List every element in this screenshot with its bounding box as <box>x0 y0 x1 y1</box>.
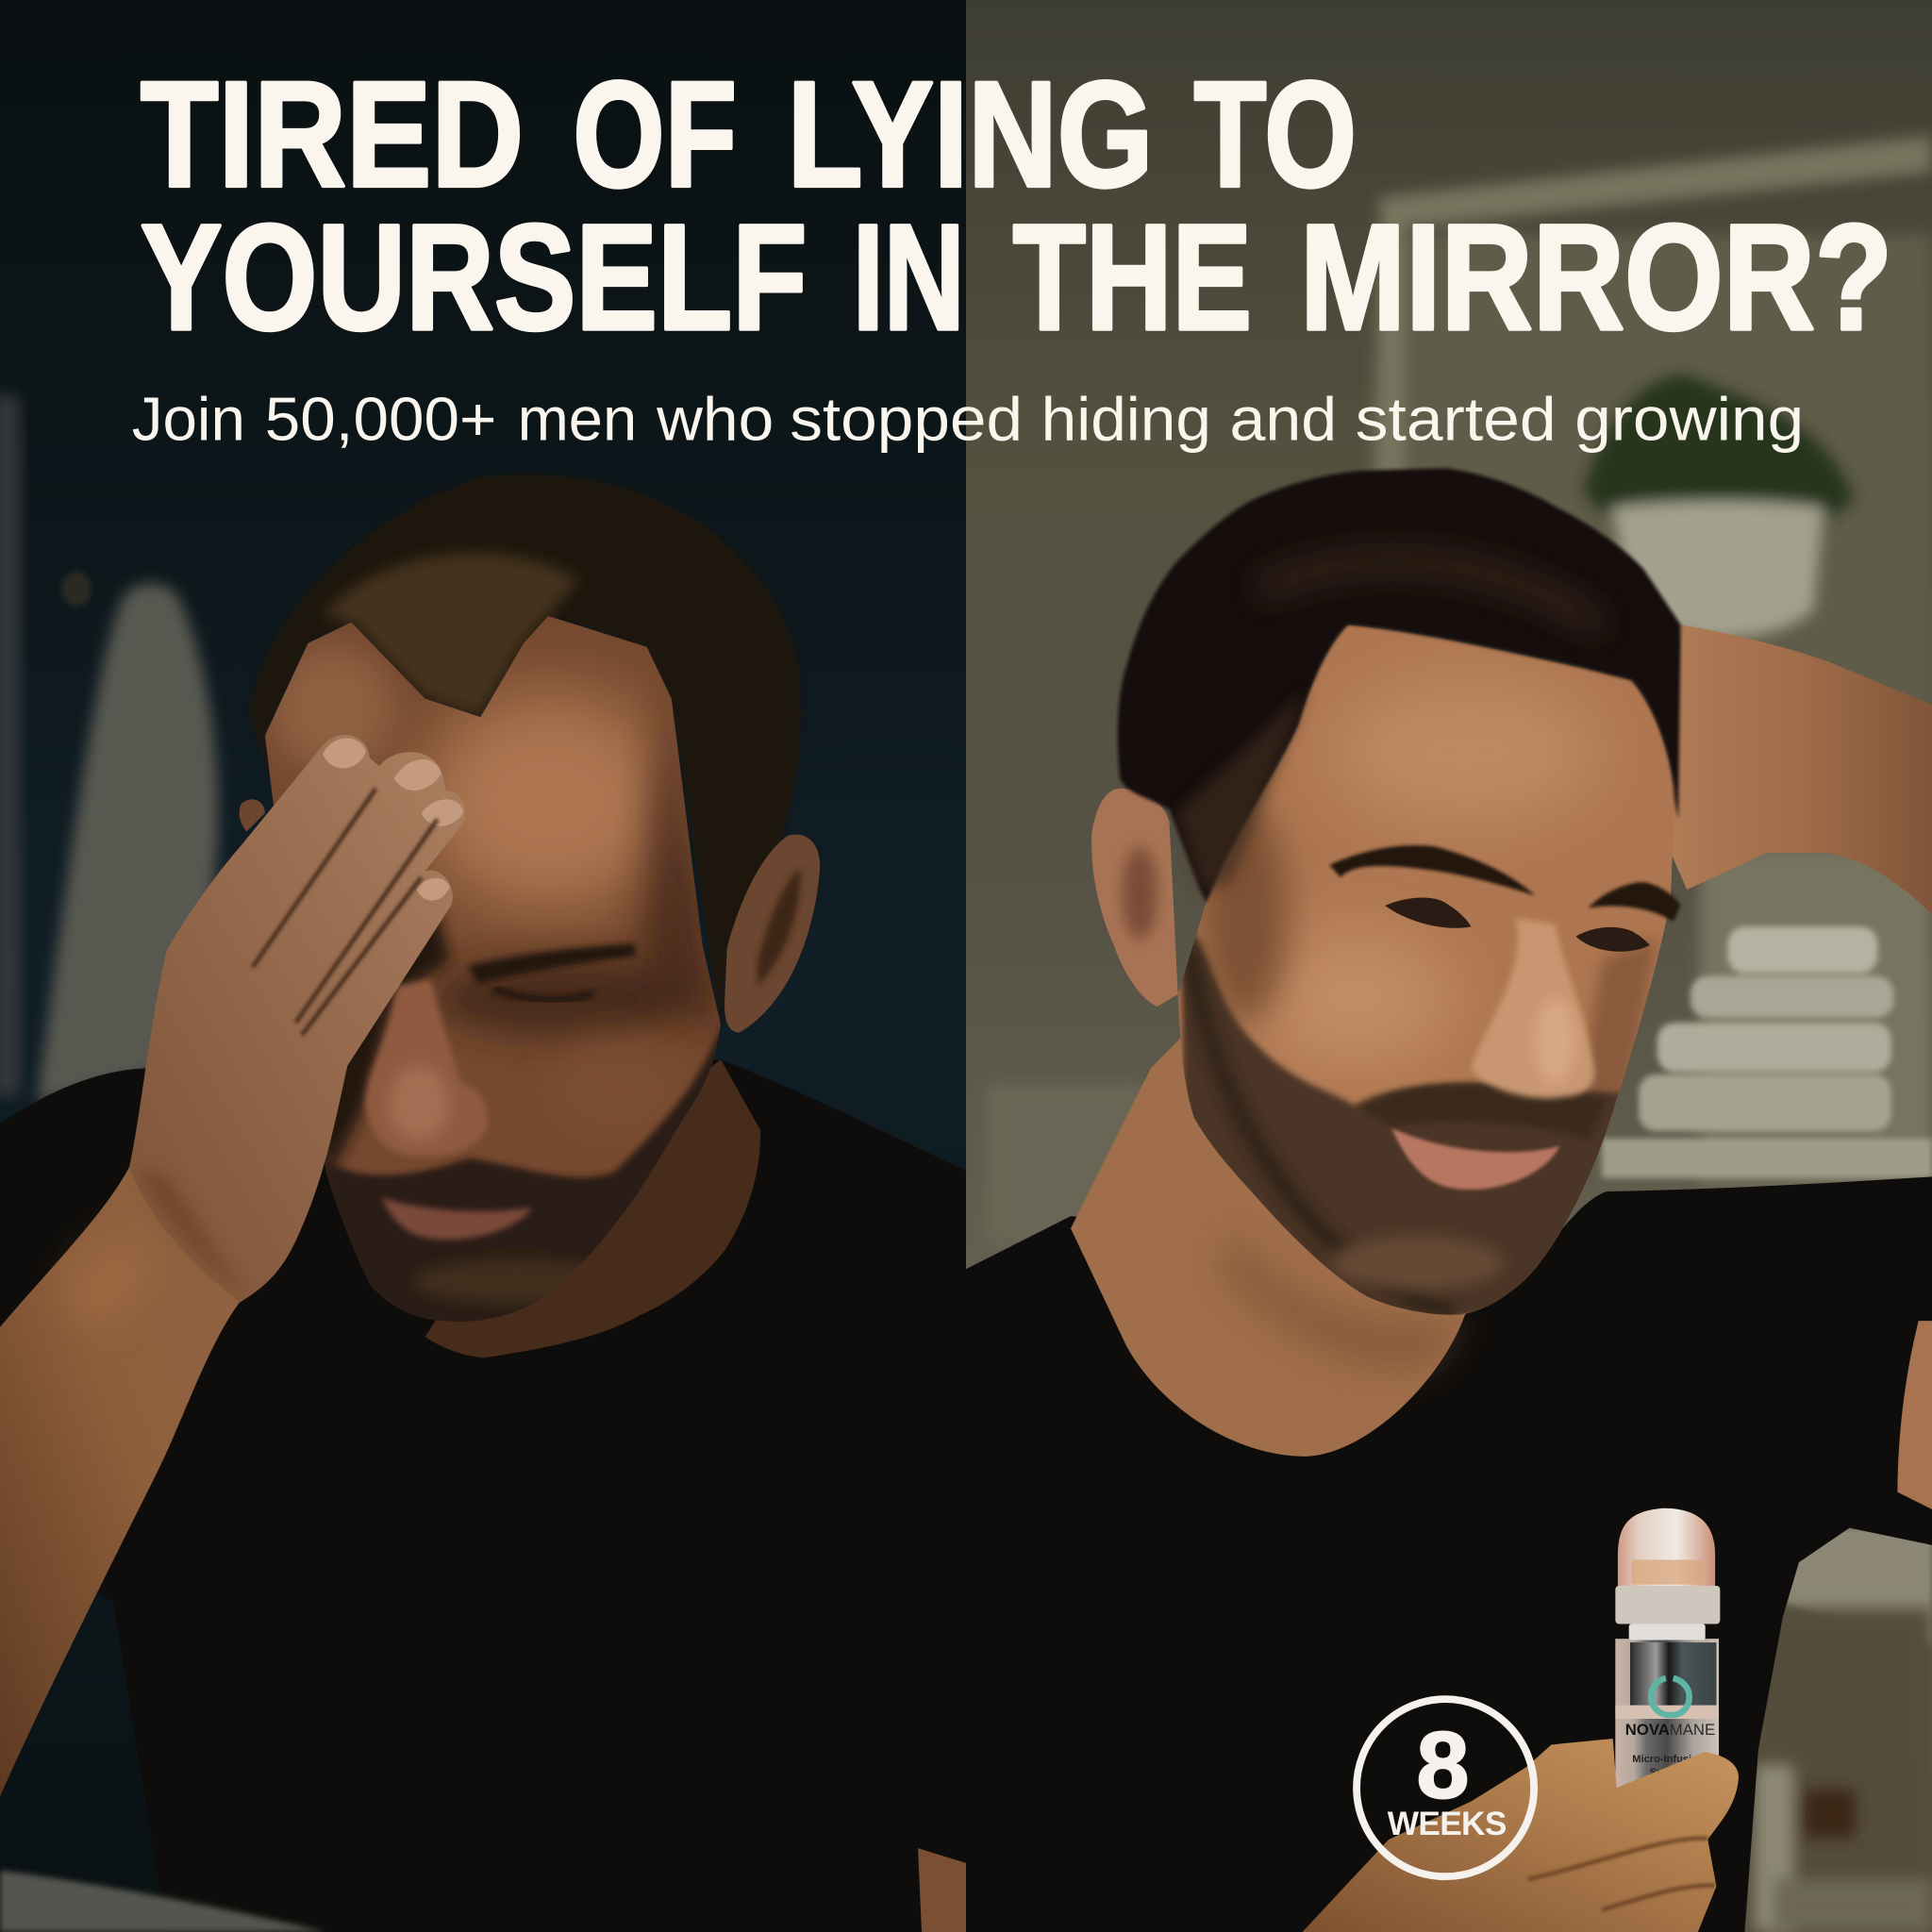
face <box>1171 616 1688 1331</box>
hand shadow <box>138 1171 246 1293</box>
chin highlight <box>1331 1236 1503 1291</box>
inner ear <box>1123 846 1157 941</box>
right face shade <box>1577 937 1657 1109</box>
mouth <box>1391 1127 1560 1190</box>
black t-shirt <box>966 1176 1932 1932</box>
finger gaps <box>253 789 438 1035</box>
subheadline: and <box>1230 384 1337 453</box>
hanging towel <box>37 584 218 1103</box>
small blurred bottle <box>1755 1764 1794 1932</box>
panel: before, dark bathroom with balding man <box>0 0 966 1932</box>
headline: IN <box>853 193 965 361</box>
raised forearm and hand <box>1671 625 1932 914</box>
headline: OF <box>573 50 737 218</box>
closed eye <box>492 989 594 1000</box>
nose highlight <box>1535 998 1574 1084</box>
hair highlight <box>1257 562 1602 628</box>
forearm highlight <box>51 1220 171 1343</box>
subheadline: stopped <box>790 384 1023 453</box>
eyebrow <box>468 943 636 983</box>
badge label: WEEKS <box>1388 1806 1507 1842</box>
beard <box>1183 912 1626 1324</box>
headline: LYING <box>788 50 1154 218</box>
product descriptor line 2: System <box>1650 1767 1687 1778</box>
headline: TO <box>1194 50 1357 218</box>
subheadline: Join <box>132 384 245 453</box>
headline: YOURSELF <box>141 193 808 361</box>
raised-arm sliver <box>1897 1321 1932 1509</box>
forehead light <box>419 690 677 912</box>
bottle cap <box>1618 1508 1715 1590</box>
inner ear shadow <box>758 869 801 986</box>
blurred potted plant <box>1583 375 1855 639</box>
blurred towel stack <box>1602 926 1932 1178</box>
subheadline: men <box>518 384 637 453</box>
product descriptor: Micro-Infusion <box>1632 1754 1705 1765</box>
brow shade <box>431 958 690 1038</box>
headline: TIRED <box>141 50 524 218</box>
beard edge dark <box>1189 949 1454 1313</box>
right background <box>966 0 1932 1932</box>
bottle body <box>1615 1639 1719 1789</box>
product hand <box>1303 1739 1739 1932</box>
eyes <box>1385 897 1650 952</box>
small blurred jar <box>1804 1789 1856 1839</box>
forehead light <box>1331 677 1602 825</box>
mouth <box>382 1198 532 1240</box>
nose highlight <box>390 1066 448 1140</box>
neck <box>425 1059 760 1357</box>
product bottle: Novamane <box>1615 1508 1720 1789</box>
subheadline: 50,000+ <box>265 384 496 453</box>
beard highlight <box>413 1259 623 1304</box>
hairline shade <box>641 690 721 1035</box>
beard <box>321 1010 740 1343</box>
neck <box>1071 986 1557 1457</box>
hair crown <box>249 475 801 1029</box>
cheek <box>548 1041 684 1140</box>
bottom-left mirror edge <box>0 1871 326 1932</box>
subheadline: hiding <box>1041 384 1211 453</box>
8 weeks badge <box>1357 1699 1534 1876</box>
eyebrows <box>1329 845 1681 922</box>
moustache <box>1361 1084 1607 1140</box>
nose <box>365 979 488 1157</box>
headline: THE <box>1013 193 1252 361</box>
elbow sliver <box>918 1848 966 1932</box>
ear <box>724 835 820 1033</box>
hand with fingers on forehead <box>129 735 465 1303</box>
fingernails <box>323 738 463 901</box>
badge ring <box>1357 1699 1534 1876</box>
finger crease <box>1528 1839 1715 1909</box>
subheadline <box>132 384 1804 453</box>
panel: after, bright bathroom with confident man <box>966 0 1932 1932</box>
subheadline: growing <box>1574 384 1804 453</box>
ear <box>1091 789 1178 1007</box>
side hair fade <box>1176 690 1306 893</box>
cheek light <box>1257 930 1454 1066</box>
badge number: 8 <box>1417 1713 1469 1819</box>
towel hook <box>61 572 92 607</box>
nose <box>1472 918 1594 1098</box>
hand cast shadow <box>308 887 450 1183</box>
brand name: NOVAMANE <box>1625 1722 1715 1739</box>
neck shadow under jaw <box>1220 1232 1465 1370</box>
lower counter <box>1774 1879 1932 1932</box>
white neck <box>1629 1624 1706 1640</box>
lower shelf <box>1774 1528 1932 1645</box>
cap threads <box>1615 1586 1720 1624</box>
temple shade <box>1201 801 1288 1023</box>
thinning hair patch <box>323 553 579 717</box>
left background <box>0 0 966 1932</box>
forearm <box>0 1167 246 1796</box>
headline <box>141 50 1892 361</box>
teal logo ring <box>1651 1678 1690 1715</box>
subheadline: started <box>1356 384 1557 453</box>
clear band <box>1615 1706 1719 1719</box>
blurred wall edge <box>0 394 20 1096</box>
blurred wall and shelving <box>986 136 1932 1244</box>
hair <box>1118 468 1681 902</box>
black t-shirt <box>0 1059 966 1932</box>
face <box>264 616 721 1322</box>
chrome band <box>1630 1642 1716 1706</box>
subheadline: who <box>656 384 774 453</box>
cap inner detail <box>1631 1560 1703 1585</box>
